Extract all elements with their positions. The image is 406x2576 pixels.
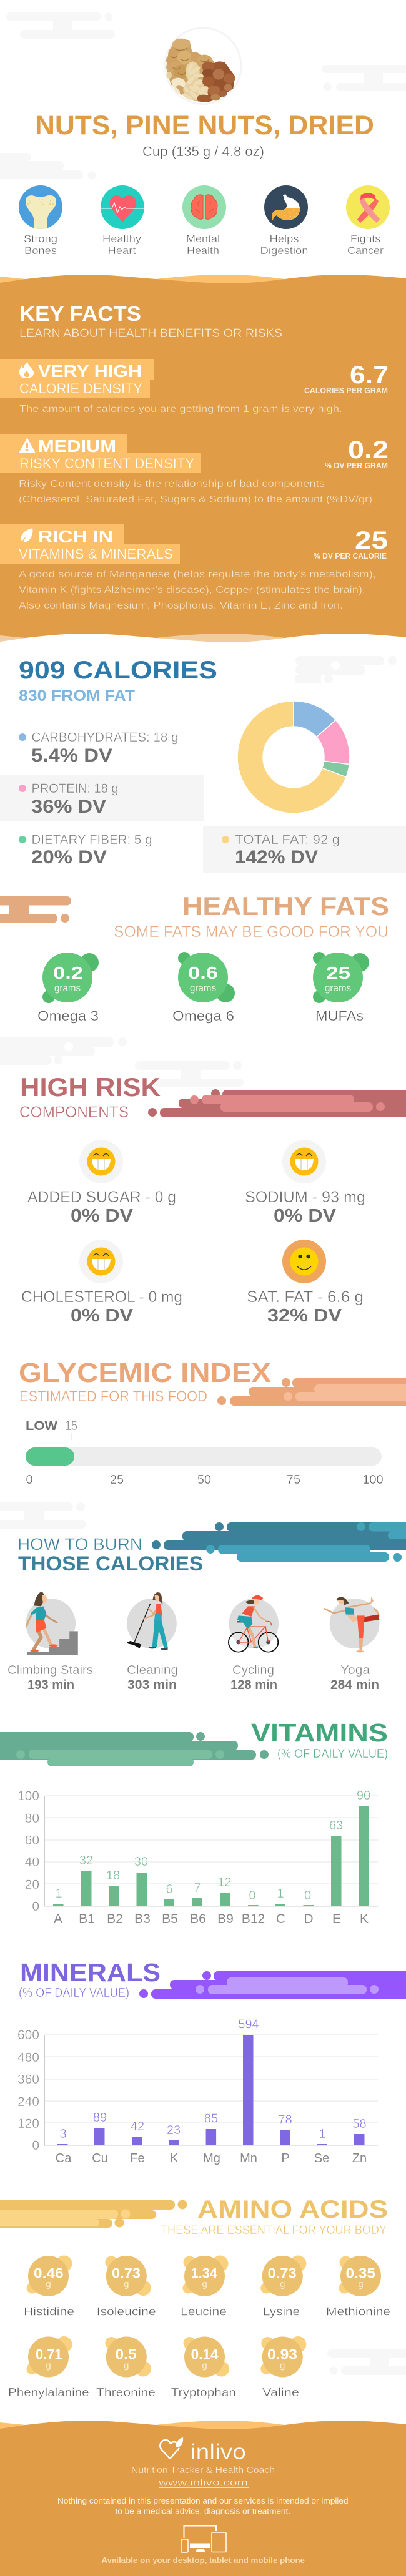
amino acid: threonine: 0.5 <box>115 2346 137 2363</box>
component: sodium: 0% DV <box>274 1206 337 1226</box>
disclaimer: Nothing contained in this presentation and our services is intended or implied <box>57 2496 349 2505</box>
benefit label: healthy heart: Heart <box>107 245 136 257</box>
legend: carbohydrates: CARBOHYDRATES: 18 g <box>31 730 179 745</box>
component: cholesterol: 0% DV <box>71 1306 134 1326</box>
amino acid: lysine: g <box>280 2279 285 2290</box>
bar chart: vitamins: 1 <box>55 1887 62 1901</box>
bar chart: minerals: Mg <box>203 2152 220 2165</box>
bubble: omega 3: Omega 3 <box>37 1008 99 1024</box>
legend: total fat: 142% DV <box>235 847 318 868</box>
amino acid: valine: Valine <box>262 2386 299 2399</box>
almonds <box>181 61 209 101</box>
bar chart: minerals: 240 <box>17 2095 39 2109</box>
legend: dietary fiber <box>19 832 152 868</box>
icon: flame <box>19 362 34 378</box>
bar chart: vitamins: 12 <box>217 1876 232 1889</box>
fact: calorie density <box>0 359 389 414</box>
bar chart: minerals: 120 <box>17 2117 39 2131</box>
amino acid: phenylalanine: g <box>46 2361 51 2371</box>
bar chart: minerals <box>17 2018 378 2165</box>
fact: vitamins and minerals <box>0 524 388 611</box>
amino acid: phenylalanine <box>8 2336 89 2399</box>
bar chart: vitamins: D <box>304 1912 314 1926</box>
activity: cycling <box>229 1595 279 1692</box>
legend: protein <box>0 775 204 821</box>
legend: total fat <box>203 826 406 873</box>
bar chart: minerals: K <box>170 2152 179 2165</box>
legend: total fat: TOTAL FAT: 92 g <box>235 832 340 847</box>
component: added sugar <box>27 1140 176 1226</box>
benefit label: fights cancer: Cancer <box>347 245 384 257</box>
bar chart: vitamins: 40 <box>25 1855 39 1869</box>
amino acid: histidine: g <box>46 2279 51 2290</box>
benefit label: healthy heart: Healthy <box>102 233 142 245</box>
component: added sugar: 0% DV <box>71 1206 134 1226</box>
subheading: SOME FATS MAY BE GOOD FOR YOU <box>114 923 389 941</box>
icon: mental health brain <box>182 185 226 229</box>
disclaimer: to be a medical advice, diagnosis or treatment. <box>115 2507 290 2516</box>
bar chart: vitamins: B6 <box>190 1912 206 1926</box>
bar chart: vitamins: 60 <box>25 1833 39 1848</box>
bar chart: minerals: 78 <box>278 2113 292 2127</box>
bubble: omega 3: 0.2 <box>53 963 83 982</box>
bubble: omega 3 <box>37 953 99 1024</box>
bar scale: 50 <box>197 1473 211 1487</box>
panel: header <box>19 28 390 257</box>
bar chart: vitamins: 30 <box>134 1855 148 1869</box>
bubble: omega 6: 0.6 <box>188 963 218 982</box>
amino acid: valine: 0.93 <box>267 2346 297 2363</box>
unit: CALORIES PER GRAM <box>304 386 388 395</box>
legend: protein: PROTEIN: 18 g <box>31 781 119 796</box>
heading decoration <box>0 1732 269 1766</box>
amino acid: valine <box>260 2336 306 2399</box>
description: A good source of Manganese (helps regulate the body’s metabolism), <box>19 569 376 580</box>
bubble: omega 6: Omega 6 <box>172 1008 234 1024</box>
amino acid: leucine: g <box>202 2279 207 2290</box>
fact: risky content density <box>0 434 389 505</box>
legend: dietary fiber: 20% DV <box>31 847 107 868</box>
bar chart: minerals: 600 <box>17 2028 39 2042</box>
icon: healthy heart <box>101 185 144 229</box>
amino acid: isoleucine <box>97 2256 156 2318</box>
bar chart: vitamins: K <box>360 1912 369 1926</box>
bar chart: minerals: Fe <box>130 2152 145 2165</box>
bar chart: minerals: 42 <box>131 2120 144 2133</box>
description: The amount of calories you are getting from 1 gram is very high. <box>19 404 342 414</box>
amino acid: tryptophan: Tryptophan <box>171 2386 236 2399</box>
component: sodium <box>245 1140 365 1226</box>
amino acid: isoleucine: g <box>124 2279 129 2290</box>
bar chart: vitamins: B9 <box>217 1912 234 1926</box>
bar chart: minerals: 85 <box>204 2112 218 2126</box>
hazelnuts <box>197 61 235 102</box>
panel: minerals <box>17 1958 406 2165</box>
heading decoration <box>152 1522 406 1562</box>
bar chart: minerals: Ca <box>56 2152 72 2165</box>
amino acid: methionine: g <box>358 2279 364 2290</box>
legend: carbohydrates <box>19 730 179 766</box>
bar chart: vitamins: 0 <box>32 1899 39 1914</box>
bar chart: minerals: 58 <box>352 2117 367 2131</box>
bar chart: vitamins: B3 <box>134 1912 151 1926</box>
panel: calories <box>0 657 406 873</box>
heading: AMINO ACIDS <box>197 2196 388 2223</box>
bar chart: vitamins <box>17 1789 378 1926</box>
heading decoration <box>0 896 71 923</box>
benefit label: strong bones: Strong <box>24 233 57 245</box>
component: saturated fat: 32% DV <box>267 1306 342 1326</box>
amino acid: tryptophan: g <box>202 2361 207 2371</box>
bubble: MUFAs <box>313 952 369 1024</box>
icon: fights cancer ribbon <box>346 185 390 229</box>
subheading: LEARN ABOUT HEALTH BENEFITS OR RISKS <box>19 326 282 340</box>
heading: 909 CALORIES <box>19 657 217 684</box>
amino acid: threonine: Threonine <box>96 2386 156 2399</box>
bar chart: minerals: Zn <box>352 2152 367 2165</box>
rating: MEDIUM <box>38 436 116 456</box>
heading: HIGH RISK <box>20 1072 161 1102</box>
benefit label: mental health: Health <box>187 245 219 257</box>
icon: devices <box>181 2525 226 2552</box>
amino acid: threonine: g <box>124 2361 129 2371</box>
activity: yoga: Yoga <box>340 1663 370 1677</box>
panel: amino acids <box>0 2196 390 2399</box>
activity: cycling: 128 min <box>230 1678 277 1692</box>
benefit label: strong bones: Bones <box>24 245 57 257</box>
bubble: omega 3: grams <box>54 983 81 994</box>
heading: VITAMINS <box>251 1718 388 1747</box>
amino acid: histidine: Histidine <box>24 2304 74 2318</box>
icon: leaf <box>21 528 32 542</box>
component: cholesterol <box>21 1240 182 1326</box>
activity: yoga: 284 min <box>330 1678 379 1692</box>
unit: % DV PER GRAM <box>325 461 388 470</box>
progress bar <box>26 1447 382 1466</box>
activity: cycling: Cycling <box>232 1663 274 1677</box>
activity: yoga <box>324 1597 379 1692</box>
subheading: COMPONENTS <box>19 1104 129 1121</box>
icon: helps digestion stomach <box>264 185 308 229</box>
bar chart: minerals: Se <box>314 2152 329 2165</box>
bubble: omega 6: grams <box>190 983 216 994</box>
bar scale: 0 <box>26 1473 33 1487</box>
bar chart: vitamins: 100 <box>17 1789 39 1803</box>
bubble: MUFAs: 25 <box>326 963 350 982</box>
benefit label: helps digestion: Helps <box>270 233 299 245</box>
legend: dietary fiber: DIETARY FIBER: 5 g <box>31 832 152 847</box>
amino acid: lysine: Lysine <box>263 2304 300 2318</box>
bar chart: vitamins: B2 <box>107 1912 123 1926</box>
bar chart: minerals: 0 <box>32 2138 39 2153</box>
bar chart: minerals: 23 <box>167 2123 181 2137</box>
amino acid: methionine <box>326 2256 390 2318</box>
heading decoration <box>217 1378 406 1406</box>
bar chart: vitamins: 18 <box>106 1869 120 1883</box>
fact name: CALORIE DENSITY <box>19 381 142 396</box>
panel: key facts <box>0 275 406 645</box>
panel: how to burn calories <box>7 1522 406 1692</box>
food photo: mixed nuts <box>165 28 241 104</box>
donut chart <box>237 701 350 813</box>
heading: KEY FACTS <box>19 303 141 326</box>
heading line 1: HOW TO BURN <box>17 1535 142 1554</box>
description: (Cholesterol, Saturated Fat, Sugars & Sodium) to the amount (%DV/gr). <box>19 494 375 505</box>
amino acid: threonine <box>96 2337 156 2399</box>
value: 6.7 <box>350 361 389 389</box>
amino acid: histidine <box>24 2256 74 2318</box>
bubble: MUFAs: MUFAs <box>315 1008 364 1024</box>
bar chart: vitamins: B12 <box>242 1912 265 1926</box>
amino acid: lysine <box>260 2256 306 2318</box>
subheading: ESTIMATED FOR THIS FOOD <box>19 1388 207 1405</box>
fact name: RISKY CONTENT DENSITY <box>19 456 194 471</box>
heading decoration <box>148 1089 406 1117</box>
bar scale: 100 <box>362 1473 384 1487</box>
bar chart: vitamins: 1 <box>277 1887 284 1901</box>
description: Risky Content density is the relationship of bad components <box>19 479 325 489</box>
panel: healthy fats <box>0 891 389 1024</box>
legend: carbohydrates: 5.4% DV <box>31 745 112 766</box>
amino acid: tryptophan: 0.14 <box>191 2346 219 2363</box>
availability note: Available on your desktop, tablet and mobile phone <box>101 2555 305 2565</box>
bar scale: 25 <box>110 1473 124 1487</box>
bar chart: minerals: 594 <box>238 2018 259 2032</box>
bubble: omega 6 <box>172 952 235 1024</box>
bar scale <box>26 1473 384 1487</box>
amino acid: leucine <box>181 2256 229 2318</box>
amino acid: lysine: 0.73 <box>268 2265 297 2281</box>
heading: HEALTHY FATS <box>182 891 389 921</box>
heading: GLYCEMIC INDEX <box>19 1358 271 1388</box>
bar chart: vitamins: B1 <box>79 1912 95 1926</box>
bar scale: 75 <box>287 1473 300 1487</box>
activity: cleaning <box>127 1592 178 1692</box>
heading decoration <box>0 2200 187 2228</box>
unit: % DV PER CALORIE <box>314 552 387 561</box>
rating: VERY HIGH <box>38 361 142 381</box>
amino acid: methionine: 0.35 <box>346 2265 375 2281</box>
activity: cleaning: 303 min <box>127 1678 177 1692</box>
bar chart: vitamins: 20 <box>25 1878 39 1892</box>
bar chart: minerals: 480 <box>17 2050 39 2065</box>
cashews <box>171 78 186 94</box>
glycemic value: 15 <box>65 1419 77 1433</box>
panel: glycemic index <box>19 1358 406 1487</box>
bar chart: vitamins: 0 <box>249 1889 256 1903</box>
bar chart: vitamins: B5 <box>162 1912 178 1926</box>
rating: RICH IN <box>38 527 113 546</box>
amino acid: isoleucine: Isoleucine <box>97 2304 156 2318</box>
tagline: Nutrition Tracker & Health Coach <box>131 2465 275 2476</box>
bar chart: minerals: Cu <box>92 2152 108 2165</box>
benefit label: mental health: Mental <box>186 233 220 245</box>
bar chart: vitamins: C <box>276 1912 285 1926</box>
benefit label: helps digestion: Digestion <box>260 245 309 257</box>
bar chart: minerals: Mn <box>240 2152 257 2165</box>
bubble: MUFAs: grams <box>325 983 351 994</box>
heading line 2: THOSE CALORIES <box>18 1552 203 1575</box>
activity: climbing stairs <box>7 1592 93 1692</box>
amino acid: leucine: 1.34 <box>191 2265 217 2281</box>
subheading: 830 FROM FAT <box>19 687 135 705</box>
activity: climbing stairs: 193 min <box>27 1678 74 1692</box>
bar chart: vitamins: 0 <box>304 1889 311 1903</box>
legend: protein: 36% DV <box>31 796 106 817</box>
walnuts <box>166 39 212 79</box>
amino acid: phenylalanine: 0.71 <box>36 2346 62 2363</box>
bar chart: minerals: 3 <box>59 2127 67 2141</box>
bar chart: vitamins: 90 <box>357 1789 370 1803</box>
bar chart: minerals: 360 <box>17 2072 39 2087</box>
value: 0.2 <box>348 436 389 464</box>
component: saturated fat: SAT. FAT - 6.6 g <box>247 1288 364 1306</box>
heading: MINERALS <box>20 1958 161 1987</box>
bar chart: minerals: 89 <box>93 2111 107 2125</box>
amino acid: leucine: Leucine <box>181 2304 227 2318</box>
description: Vitamin K (fights Alzheimer’s disease), Copper (stimulates the brain). <box>19 585 365 595</box>
subheading: THESE ARE ESSENTIAL FOR YOUR BODY <box>161 2224 387 2237</box>
logo wordmark: inlivo <box>191 2441 246 2464</box>
bar chart: vitamins: 32 <box>79 1854 93 1868</box>
panel: high risk components <box>19 1072 406 1326</box>
amino acid: tryptophan <box>171 2337 236 2399</box>
component: saturated fat <box>247 1240 364 1326</box>
amino acid: valine: g <box>280 2361 285 2371</box>
component: added sugar: ADDED SUGAR - 0 g <box>27 1188 176 1206</box>
bar chart: vitamins: A <box>54 1912 62 1926</box>
activity: cleaning: Cleaning <box>127 1663 178 1677</box>
icon: strong bones <box>19 185 62 229</box>
value: 25 <box>355 527 388 554</box>
amino acid: phenylalanine: Phenylalanine <box>8 2386 89 2399</box>
icon: warning <box>19 438 36 453</box>
bar chart: vitamins: 80 <box>25 1811 39 1826</box>
bar chart: vitamins: 6 <box>166 1883 173 1896</box>
title: NUTS, PINE NUTS, DRIED <box>35 110 374 140</box>
bar chart: vitamins: 7 <box>194 1881 201 1895</box>
component: sodium: SODIUM - 93 mg <box>245 1188 365 1206</box>
bar chart: minerals: 1 <box>319 2127 326 2141</box>
subheading: (% OF DAILY VALUE) <box>277 1747 388 1761</box>
benefit label: fights cancer: Fights <box>350 233 380 245</box>
heading decoration <box>139 1971 406 1999</box>
glycemic rating: LOW <box>26 1419 57 1433</box>
amino acid: isoleucine: 0.73 <box>112 2265 141 2281</box>
amino acid: methionine: Methionine <box>326 2304 390 2318</box>
serving size: Cup (135 g / 4.8 oz) <box>142 144 264 159</box>
fact name: VITAMINS & MINERALS <box>19 546 173 562</box>
amino acid: histidine: 0.46 <box>34 2265 64 2281</box>
description: Also contains Magnesium, Phosphorus, Vitamin E, Zinc and Iron. <box>19 600 343 611</box>
subheading: (% OF DAILY VALUE) <box>19 1986 129 2000</box>
logo: inlivo heart <box>160 2437 183 2459</box>
bar chart: vitamins: 63 <box>329 1819 343 1833</box>
website: www.inlivo.com <box>158 2478 248 2488</box>
panel: footer <box>0 2421 406 2576</box>
activity: climbing stairs: Climbing Stairs <box>7 1663 93 1677</box>
panel: vitamins <box>0 1718 388 1926</box>
bar chart: vitamins: E <box>332 1912 341 1926</box>
component: cholesterol: CHOLESTEROL - 0 mg <box>21 1288 182 1306</box>
bar chart: minerals: P <box>281 2152 290 2165</box>
